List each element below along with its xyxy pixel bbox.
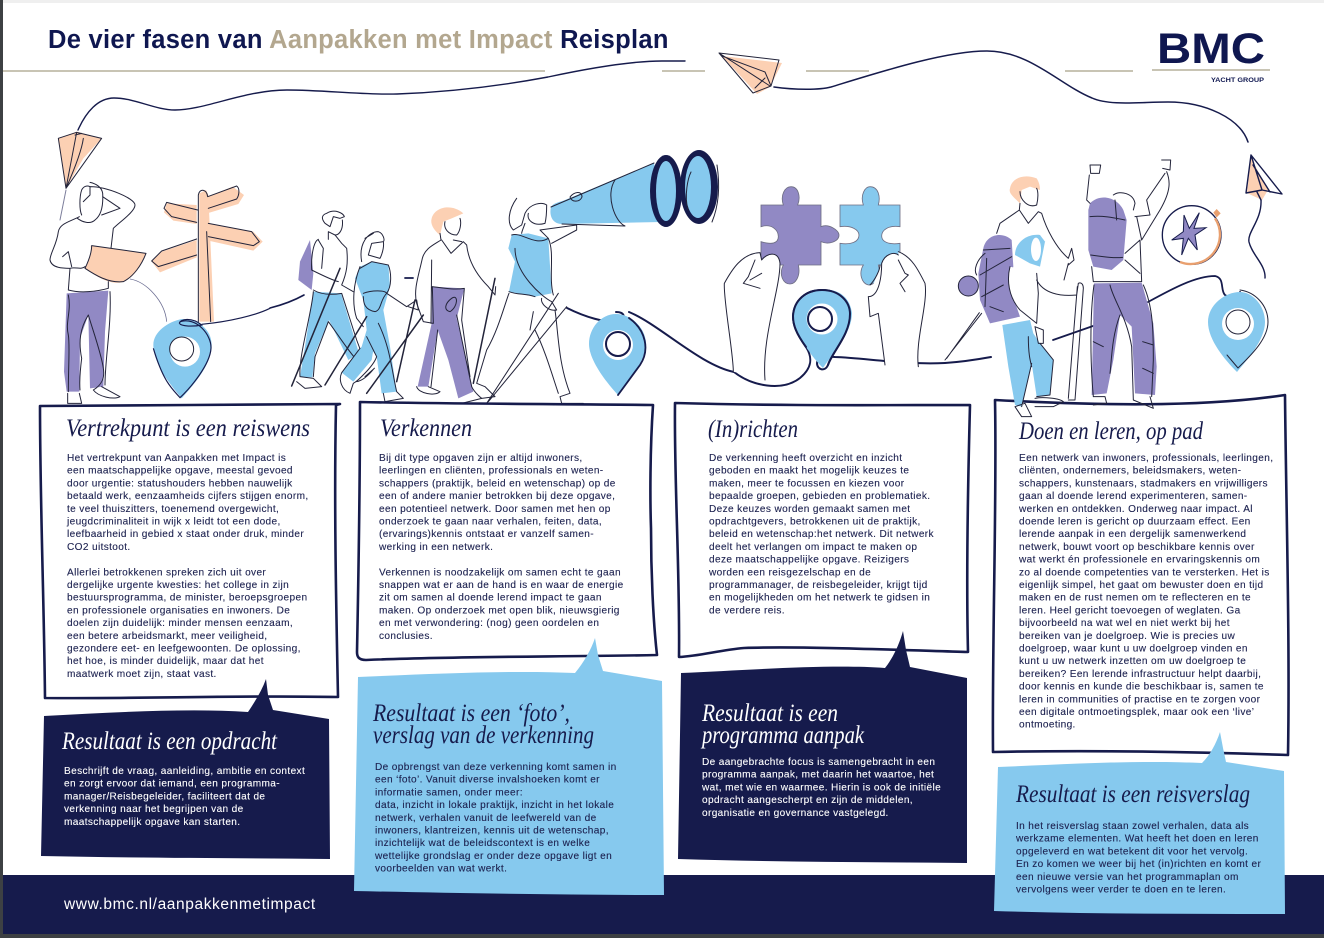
body text: wat, met wie en waarmee. Hierin is ook de initiële: [701, 782, 941, 793]
body text: doende leren is gericht op duurzaam effect. Een: [1019, 516, 1251, 528]
icon: location pin 2: [589, 314, 646, 395]
body text: ontmoeting.: [1019, 720, 1076, 731]
journey line: flight path: [78, 51, 1265, 386]
panel: Resultaat is een foto: [354, 638, 664, 895]
icon: paper kite left: [58, 132, 102, 220]
body text: een of andere manier betrokken bij deze opgave,: [379, 491, 615, 502]
body text: wettelijke grondslag er onder deze opgave ligt en: [374, 851, 612, 862]
body text: leren in communities of practise en te zorgen voor: [1019, 694, 1261, 705]
body text: De opbrengst van deze verkenning komt samen in: [375, 762, 617, 773]
title: De vier fasen van Aanpakken met Impact Reisplan: [48, 26, 669, 54]
icon: paper plane right: [1246, 155, 1282, 200]
icon: location pin 4: [1208, 290, 1268, 372]
footer band: [0, 875, 1324, 938]
body text: en met verwondering: (nog) geen oordelen en: [379, 618, 599, 629]
body text: de verdere reis.: [709, 605, 785, 616]
illustration: four walking hikers: [292, 198, 583, 403]
body text: een potentieel netwerk. Door samen met hen op: [379, 504, 611, 515]
puzzle: blue: [840, 187, 900, 285]
body text: beleid en wetenschap:het netwerk. Dit netwerk: [709, 529, 935, 540]
body text: manager/Reisbegeleider, faciliteert dat de: [64, 791, 265, 802]
illustration: hikers at destination: [945, 160, 1171, 417]
body text: jeugdcriminaliteit in wijk x leidt tot een dode,: [66, 516, 281, 528]
heading: (In)richten: [708, 416, 798, 443]
body text: Bij dit type opgaven zijn er altijd inwoners,: [379, 453, 583, 464]
body text: In het reisverslag staan zowel verhalen, data als: [1016, 821, 1249, 832]
body text: opdracht aangescherpt en zijn de middelen,: [702, 795, 913, 806]
heading: Resultaat is een opdracht: [61, 728, 278, 755]
body text: kunt u uw netwerk inzetten om uw doelgroep te: [1019, 656, 1246, 667]
body text: maken en de rust nemen om te reflecteren en te: [1019, 593, 1251, 604]
body text: CO2 uitstoot.: [67, 542, 131, 553]
icon: location pin 1: [130, 279, 270, 398]
icon: compass: [1162, 206, 1221, 264]
body text: programmanager, de reisbegeleider, krijgt tijd: [709, 580, 928, 591]
body text: netwerk, verhalen vanuit de leefwereld van de: [375, 813, 597, 824]
body text: een ‘foto’. Vanuit diverse invalshoeken komt er: [375, 775, 600, 786]
body text: door kennis en kunde die beschikbaar is, samen te: [1019, 682, 1264, 693]
body text: informatie samen, onder meer:: [375, 787, 523, 798]
body text: bereiken? Een lerende infrastructuur helpt daarbij,: [1019, 669, 1261, 680]
body text: verkenning naar het begrijpen van de: [64, 804, 244, 815]
body text: en professionele organisaties en inwoners. De: [67, 605, 290, 616]
logo: BMC Yacht Group: YACHT GROUP: [1211, 77, 1264, 84]
body text: cliënten, ondernemers, beleidsmakers, weten-: [1019, 466, 1241, 477]
heading: Verkennen: [380, 415, 472, 442]
body text: gezondere eet- en leefgewoonten. De oplossing,: [67, 644, 301, 654]
body text: een digitale ontmoetingsplek, maar ook een ‘live’: [1019, 707, 1254, 718]
body text: voorbeelden van wat werkt.: [375, 864, 507, 875]
body text: opgeleverd en wat betekent dit voor het vervolg.: [1016, 846, 1248, 857]
body text: De aangebrachte focus is samengebracht in een: [702, 757, 935, 768]
illustration: kite, man with map, signpost and pin: [50, 132, 270, 403]
body text: bijvoorbeeld na wat wel en niet werkt bij het: [1019, 618, 1230, 629]
body text: maken, meer te focussen en kiezen voor: [709, 478, 905, 489]
connecting line to hikers: [270, 295, 304, 308]
body text: Verkennen is noodzakelijk om samen echt te gaan: [379, 567, 621, 578]
body text: eigenlijk simpel, het gaat om bewuster doen en tijd: [1019, 580, 1263, 591]
heading: Vertrekpunt is een reiswens: [66, 415, 310, 442]
body text: een betere arbeidsmarkt, meer veiligheid,: [67, 631, 267, 642]
heading: Doen en leren, op pad: [1018, 418, 1203, 445]
illustration: man with map: [50, 182, 146, 403]
body text: Een netwerk van inwoners, professionals, leerlingen,: [1019, 453, 1273, 464]
hands: [724, 252, 926, 380]
hiker 3: [416, 207, 496, 403]
body text: vervolgens weer verder te doen en te leren.: [1016, 884, 1226, 896]
body text: inwoners, klantreizen, kennis uit de wetenschap,: [375, 826, 609, 836]
body text: worden een reisgezelschap en de: [708, 567, 871, 578]
panel: Resultaat is een foto: verslag van de verkenning: [373, 722, 594, 749]
icon: location pin 3: [793, 290, 852, 368]
hiker 4: [477, 198, 583, 403]
body text: netwerk, bouwt voort op beschikbare kennis over: [1019, 542, 1255, 553]
body text: dergelijke urgente kwesties: het college in zijn: [67, 580, 289, 591]
body text: schappers, kunstenaars, stadmakers en vrijwilligers: [1019, 478, 1268, 489]
panel: Resultaat is een reisverslag: [994, 732, 1285, 914]
body text: doelen zijn duidelijk: minder mensen eenzaam,: [67, 618, 293, 629]
footer url: www.bmc.nl/aanpakkenmetimpact: [63, 896, 316, 913]
heading: Resultaat is een ‘foto’,: [372, 700, 570, 727]
body text: Het vertrekpunt van Aanpakken met Impact is: [67, 453, 286, 464]
puzzle: purple: [761, 187, 839, 284]
body text: opdrachtgevers, betrokkenen uit de praktijk,: [709, 516, 921, 528]
body text: zo al doende competenties van te versterken. Het is: [1019, 567, 1270, 578]
body text: snappen wat er aan de hand is en waar de energie: [379, 580, 624, 591]
body text: maatwerk moet zijn, staat vast.: [67, 669, 217, 680]
body text: doelgroep, waar kunt u uw doelgroep vinden en: [1019, 644, 1248, 654]
body text: leefbaarheid in gebied x staat onder druk, minder: [67, 529, 304, 540]
body text: Allerlei betrokkenen spreken zich uit over: [67, 567, 266, 578]
illustration: signpost: [152, 186, 263, 322]
body text: (ervarings)kennis ontstaat er vanzelf samen-: [379, 529, 594, 540]
illustration: hands with puzzle pieces: [724, 187, 926, 380]
body text: zit om samen al doende lerend impact te gaan: [379, 593, 602, 604]
hiker 1: [292, 211, 362, 388]
body text: En zo komen we weer bij het (in)richten en komt er: [1016, 859, 1261, 870]
panel: Resultaat is een programma aanpak: [678, 631, 967, 863]
body text: inzichtelijk wat de beleidscontext is en welke: [375, 838, 590, 849]
body text: een nieuwe versie van het programmaplan om: [1016, 872, 1239, 883]
body text: door urgentie: statushouders hebben nauwelijk: [67, 478, 293, 489]
panel: Resultaat is een opdracht: [41, 679, 330, 859]
panel: Resultaat is een programma aanpak: programma aanpak: [700, 722, 865, 749]
body text: deelt het verlangen om impact te maken op: [709, 542, 917, 553]
hiker 2: [325, 232, 423, 402]
body text: leren. Heel gericht toevoegen of weglaten. Ga: [1019, 605, 1241, 616]
body text: en zorgt ervoor dat iemand, een programma-: [64, 779, 280, 790]
illustration: telescope binoculars: [550, 150, 719, 227]
body text: conclusies.: [379, 631, 433, 642]
body text: gaan al doende lerend experimenteren, samen-: [1019, 491, 1248, 502]
body text: schappers (praktijk, beleid en wetenschap) op de: [379, 478, 616, 489]
body text: deze maatschappelijke opgave. Reizigers: [709, 555, 909, 566]
body text: bepaalde groepen, gebieden en problematiek.: [709, 491, 930, 502]
body text: data, inzicht in lokale praktijk, inzicht in het lokale: [375, 800, 614, 811]
panel: Verkennen: [357, 402, 657, 660]
body text: Beschrijft de vraag, aanleiding, ambitie en context: [64, 766, 305, 777]
body text: maken. Op onderzoek met open blik, nieuwsgierig: [379, 605, 620, 616]
body text: betaald werk, eenzaamheids cijfers stijgen enorm,: [67, 491, 308, 502]
body text: en mogelijkheden om het netwerk te gidsen in: [709, 593, 930, 604]
header rule: [3, 70, 1270, 71]
panel: Doen en leren, op pad: [993, 395, 1289, 755]
hiker with walking pole: [997, 176, 1074, 280]
hiker with backpack: [945, 235, 1083, 417]
body text: werkzame elementen. Wat heeft het doen en leren: [1015, 834, 1259, 845]
body text: leerlingen en cliënten, professionals en weten-: [379, 466, 604, 477]
body text: te veel thuiszitters, toenemend overgewicht,: [67, 504, 279, 515]
body text: een maatschappelijke opgave, meestal gevoed: [67, 466, 293, 477]
body text: het hoe, is minder duidelijk, maar dat het: [67, 656, 264, 667]
logo: BMC Yacht Group: BMC: [1157, 25, 1265, 73]
icon: paper plane centre: [719, 53, 782, 94]
body text: organisatie en governance vastgelegd.: [702, 808, 889, 819]
body text: werken en ontdekken. Onderweg naar impact. Al: [1018, 504, 1253, 515]
body text: wat werkt én professionele en ervaringskennis om: [1018, 555, 1260, 566]
heading: Resultaat is een: [701, 700, 838, 727]
panel: (In)richten: [675, 403, 970, 657]
panel: Vertrekpunt: [40, 404, 340, 698]
body text: onderzoek te gaan naar verhalen, feiten, data,: [379, 516, 602, 528]
body text: bestuursprogramma, de minister, beroepsgroepen: [67, 593, 307, 604]
body text: Deze keuzes worden gemaakt samen met: [709, 504, 910, 515]
body text: maatschappelijk opgave kan starten.: [64, 817, 240, 828]
body text: bereiken van je doelgroep. Wie is precies uw: [1019, 631, 1235, 642]
heading: Resultaat is een reisverslag: [1015, 781, 1250, 808]
body text: De verkenning heeft overzicht en inzicht: [709, 453, 902, 464]
body text: geboden en maakt het mogelijk keuzes te: [709, 466, 909, 477]
hiker raising arms: [1087, 160, 1171, 408]
body text: lerende aanpak in een dergelijk samenwerkend: [1019, 529, 1246, 540]
body text: werking in een netwerk.: [378, 542, 493, 553]
body text: programma aanpak, met daarin het waartoe, het: [702, 770, 934, 781]
